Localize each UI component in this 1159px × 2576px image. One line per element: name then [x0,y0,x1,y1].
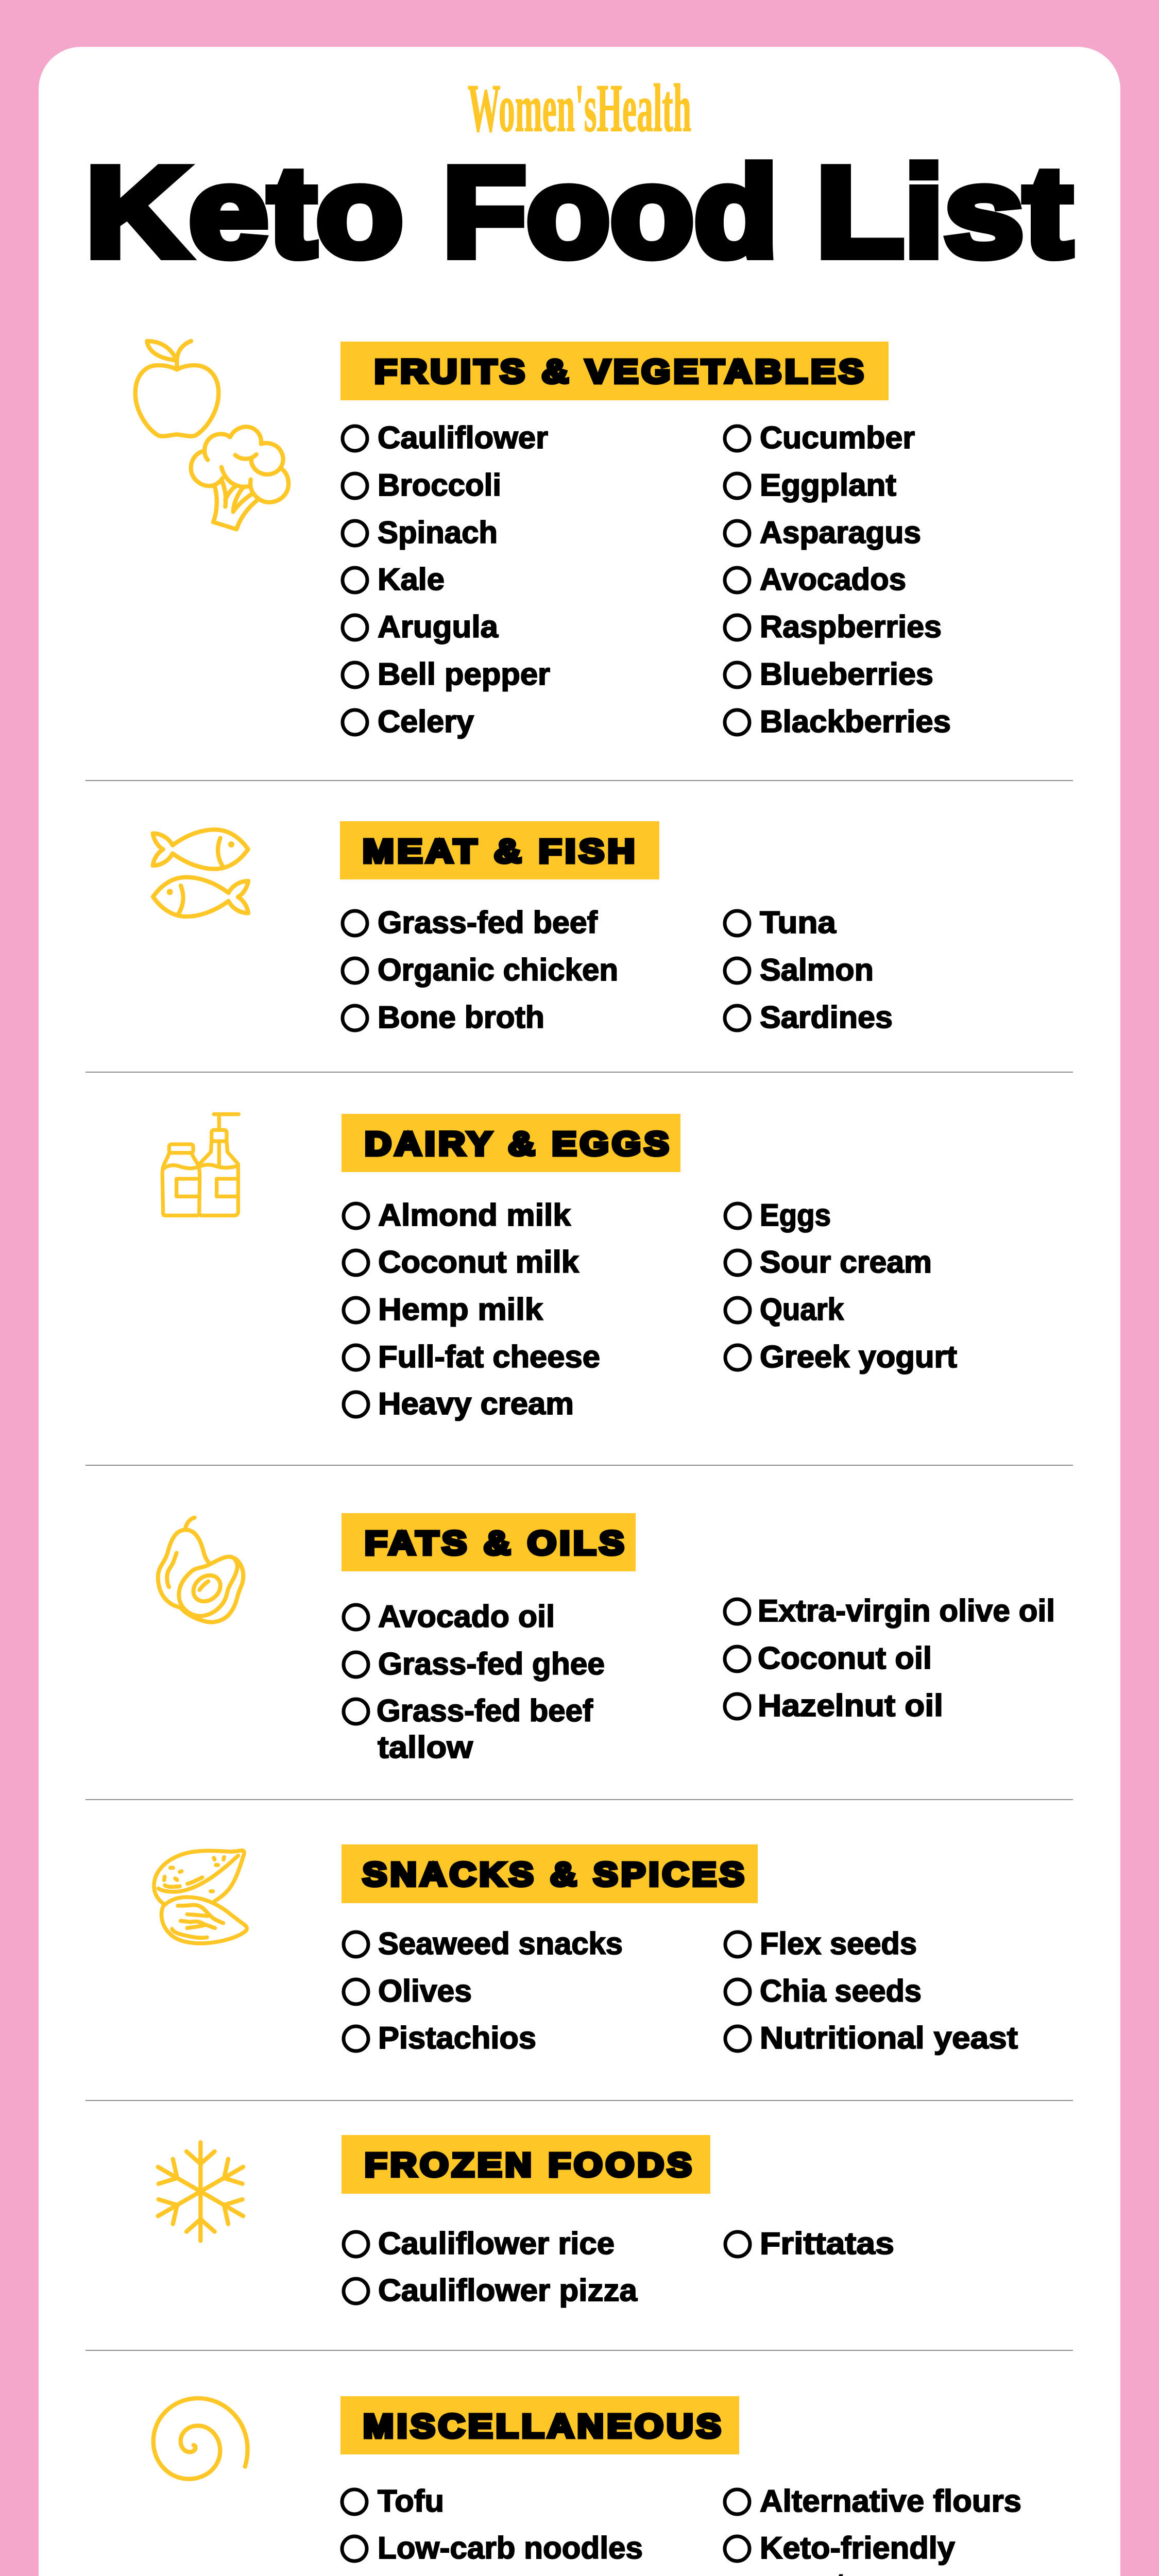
item: Celery: Celery [378,704,474,739]
icon: apple [135,341,218,436]
item: Salmon: Salmon [760,953,874,987]
item: Quark [725,1292,844,1327]
panel: miscellaneous [154,2396,1021,2576]
item: Frittatas: Frittatas [760,2226,894,2261]
item: Grass-fed beef tallow: Grass-fed beef [377,1693,593,1728]
title [86,140,1072,283]
item: Tofu [342,2484,444,2518]
item: Grass-fed beef: Grass-fed beef [378,905,598,940]
item: Flex seeds: Flex seeds [760,1926,917,1961]
item: Bell pepper: Bell pepper [378,657,550,691]
item: Arugula: Arugula [378,609,499,644]
item: Chia seeds: Chia seeds [760,1974,922,2008]
panel: dairy and eggs [162,1114,957,1421]
item: Full-fat cheese: Full-fat cheese [378,1340,600,1374]
title: Food [442,140,778,283]
item: Avocado oil: Avocado oil [378,1599,555,1634]
item: Coconut oil: Coconut oil [758,1641,932,1675]
heading: fats and oils [342,1513,636,1571]
item: Coconut milk: Coconut milk [378,1245,580,1279]
icon: almonds [154,1851,247,1943]
item: Olives: Olives [378,1974,472,2008]
title: List [816,140,1072,283]
icon: bottom fish [153,877,248,917]
panel: meat and fish [153,821,893,1035]
icon: bottles [162,1114,238,1215]
item: Keto-friendly sweeteners [725,2531,956,2576]
panel: snacks and spices [154,1844,1018,2055]
item: Heavy cream: Heavy cream [378,1386,574,1421]
item: Grass-fed beef tallow [344,1693,593,1765]
item: Cauliflower: Cauliflower [378,420,548,455]
item: Organic chicken: Organic chicken [378,953,618,987]
item: Cauliflower pizza: Cauliflower pizza [378,2273,638,2308]
item: Blackberries: Blackberries [760,704,951,739]
heading: meat and fish: MEAT & FISH [363,833,638,870]
text: Women'sHealth [468,70,691,146]
item: Avocados: Avocados [760,562,906,597]
item: Asparagus: Asparagus [760,515,921,550]
item: Keto-friendly sweeteners: Keto-friendly [760,2531,956,2565]
heading: fruits and vegetables: FRUITS & VEGETABLES [374,353,867,390]
item: Greek yogurt: Greek yogurt [760,1340,957,1374]
item: Seaweed snacks: Seaweed snacks [378,1926,623,1961]
item: Kale [343,562,445,597]
heading: meat and fish [340,821,659,879]
icon: top fish [153,829,248,869]
heading: miscellaneous: MISCELLANEOUS [363,2408,724,2445]
heading: miscellaneous [340,2396,739,2454]
item: Almond milk: Almond milk [378,1198,571,1232]
item: Nutritional yeast: Nutritional yeast [760,2021,1018,2055]
item: Grass-fed beef tallow: tallow [378,1730,473,1765]
item: Low-carb noodles: Low-carb noodles [378,2531,643,2565]
panel: fruits and vegetables [135,341,951,739]
item: Spinach: Spinach [378,515,498,550]
item: Extra-virgin olive oil: Extra-virgin olive oil [758,1594,1055,1628]
icon: two fish [153,829,248,917]
icon: snowflake [158,2142,243,2241]
item: Tuna: Tuna [760,905,837,940]
item: Eggplant: Eggplant [760,468,896,502]
heading: snacks and spices [342,1844,758,1903]
item: Bone broth: Bone broth [378,1000,544,1035]
item: Quark: Quark [760,1292,844,1327]
item: Hazelnut oil: Hazelnut oil [758,1688,943,1723]
heading: frozen foods: FROZEN FOODS [365,2146,695,2183]
item: Sardines: Sardines [760,1000,893,1035]
item: Eggs [725,1198,831,1232]
heading: dairy and eggs: DAIRY & EGGS [365,1125,672,1162]
heading: snacks and spices: SNACKS & SPICES [363,1856,747,1893]
item: Pistachios: Pistachios [378,2021,536,2055]
panel: fats and oils [158,1513,1055,1765]
item: Grass-fed ghee: Grass-fed ghee [378,1647,605,1681]
icon: avocado [158,1518,243,1622]
item: Raspberries: Raspberries [760,609,942,644]
icon: spiral [154,2398,248,2479]
heading: frozen foods [342,2135,710,2194]
title: Keto [86,140,403,283]
heading: fruits and vegetables [340,342,889,400]
icon: broccoli [191,427,288,529]
panel: frozen foods [158,2135,894,2308]
item: Sour cream: Sour cream [760,1245,932,1279]
item: Tofu: Tofu [378,2484,444,2518]
item: Alternative flours: Alternative flours [760,2484,1021,2518]
item: Hemp milk: Hemp milk [378,1292,543,1327]
item: Eggs: Eggs [760,1198,831,1232]
heading: dairy and eggs [342,1114,680,1172]
item: Cauliflower rice: Cauliflower rice [378,2226,615,2261]
item: Blueberries: Blueberries [760,657,933,691]
heading: fats and oils: FATS & OILS [365,1524,627,1562]
item: Cucumber: Cucumber [760,420,915,455]
item: Kale: Kale [378,562,445,597]
item: Broccoli: Broccoli [378,468,501,502]
item: Tuna [725,905,837,940]
